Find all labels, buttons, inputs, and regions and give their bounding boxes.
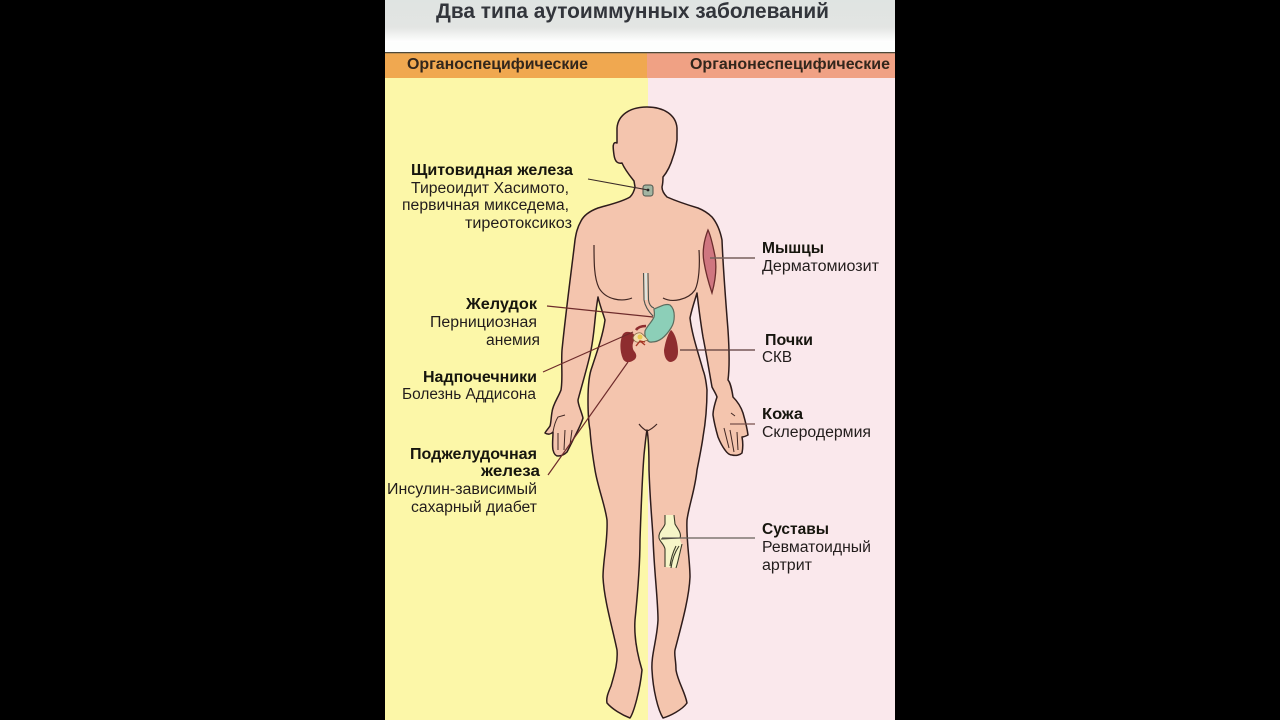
label: skin: Склеродермия bbox=[762, 424, 871, 441]
label: pancreas: сахарный диабет bbox=[411, 499, 537, 516]
right breast crease bbox=[663, 250, 699, 300]
column header: organ-specific bbox=[385, 53, 647, 78]
panel: organ-specific background bbox=[385, 78, 648, 720]
label: joints: Суставы bbox=[762, 521, 829, 538]
leader line: muscle bbox=[710, 257, 755, 259]
panel: non-organ-specific background bbox=[648, 78, 895, 720]
label: thyroid: Щитовидная железа bbox=[411, 162, 573, 179]
label: joints: артрит bbox=[762, 557, 812, 574]
icon: thyroid bbox=[643, 185, 653, 196]
label: kidneys: СКВ bbox=[762, 349, 792, 366]
leader line: adrenal bbox=[543, 332, 633, 372]
icon: knee joint bbox=[659, 515, 682, 568]
leader line: joint bbox=[662, 537, 755, 539]
label: stomach bbox=[430, 296, 540, 349]
label: kidneys: Почки bbox=[765, 332, 813, 349]
crotch line bbox=[639, 424, 657, 431]
column header: organ-specific: Органоспецифические bbox=[407, 56, 588, 73]
label: joints: Ревматоидный bbox=[762, 539, 871, 556]
icon: left kidney bbox=[620, 332, 636, 362]
icon: stomach bbox=[645, 304, 674, 342]
label: pancreas bbox=[387, 446, 540, 516]
title: Два типа аутоиммунных заболеваний bbox=[436, 0, 829, 23]
label: thyroid bbox=[402, 162, 573, 232]
label: pancreas: Поджелудочная bbox=[410, 446, 537, 463]
label: thyroid: первичная микседема, bbox=[402, 197, 569, 214]
label: muscles: Дерматомиозит bbox=[762, 258, 879, 275]
label: stomach: Пернициозная bbox=[430, 314, 537, 331]
label: thyroid: Тиреоидит Хасимото, bbox=[411, 180, 569, 197]
label: muscles bbox=[762, 240, 879, 275]
left hand fingers bbox=[553, 415, 572, 450]
label: adrenal glands: Болезнь Аддисона bbox=[402, 386, 536, 403]
leader line: thyroid bbox=[588, 179, 648, 190]
label: pancreas: железа bbox=[480, 463, 540, 480]
label: kidneys bbox=[762, 332, 813, 366]
leader line: stomach bbox=[547, 306, 653, 317]
label: adrenal glands bbox=[402, 369, 537, 403]
label: skin: Кожа bbox=[762, 406, 803, 423]
human body figure bbox=[545, 107, 748, 718]
label: stomach: Желудок bbox=[465, 296, 537, 313]
icon: pancreas and adrenal bbox=[633, 326, 648, 346]
icon: muscle bbox=[703, 230, 716, 293]
label: joints bbox=[762, 521, 871, 574]
leader line: skin bbox=[730, 423, 755, 425]
leader line: kidney bbox=[680, 349, 755, 351]
right hand fingers bbox=[724, 413, 738, 452]
label: skin bbox=[762, 406, 871, 441]
panel: title band bbox=[385, 0, 895, 52]
label: muscles: Мышцы bbox=[762, 240, 824, 257]
icon: right kidney bbox=[664, 330, 678, 362]
icon: esophagus bbox=[644, 273, 654, 316]
column header: non-organ-specific: Органонеспецифические bbox=[690, 56, 890, 73]
label: thyroid: тиреотоксикоз bbox=[465, 215, 572, 232]
column header: non-organ-specific bbox=[647, 53, 895, 78]
label: pancreas: Инсулин-зависимый bbox=[387, 481, 537, 498]
label: adrenal glands: Надпочечники bbox=[423, 369, 537, 386]
left breast crease bbox=[594, 245, 632, 300]
leader line: pancreas bbox=[548, 362, 628, 475]
label: stomach: анемия bbox=[486, 332, 540, 349]
